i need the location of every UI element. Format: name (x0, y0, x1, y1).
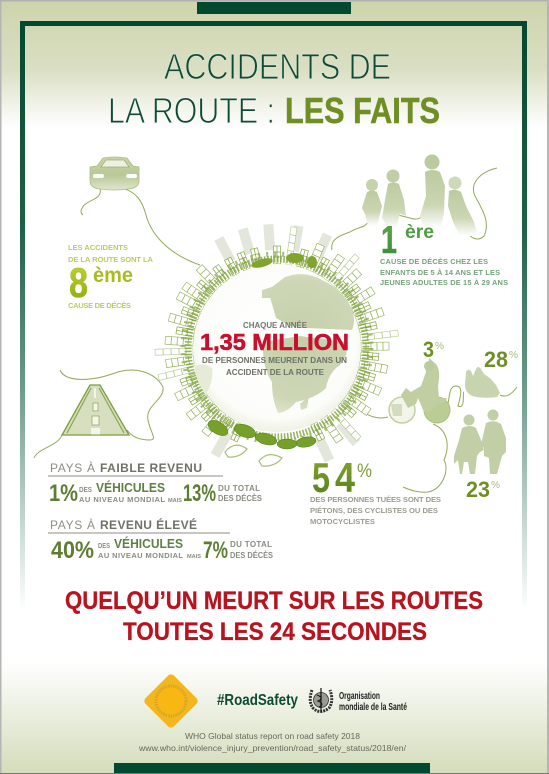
low income countries (48, 460, 263, 507)
faded far buildings (211, 224, 361, 462)
stat: 3 percent: % (435, 341, 444, 352)
trees at the top of the ring (250, 253, 317, 270)
stat: 8th cause: LES ACCIDENTS (68, 243, 128, 252)
stat: 1st cause: 1 (381, 219, 397, 262)
stat: 1st cause: ère (405, 222, 434, 243)
cable: globe to bicycle, motorcycle and pedestrians (360, 386, 517, 492)
stat: 54 percent: PIÉTONS, DES CYCLISTES OU DES (310, 506, 438, 515)
low income countries: DU TOTAL (218, 484, 260, 493)
low income countries: DES DÉCÈS (218, 494, 263, 503)
stat: 3 percent (423, 337, 444, 362)
key message (65, 587, 483, 646)
city buildings ring (155, 227, 398, 443)
stat: 28 percent: 28 (484, 347, 508, 372)
key message: TOUTES LES 24 SECONDES (123, 618, 427, 646)
globe with city ring (155, 224, 398, 466)
high income countries: PAYS À (50, 517, 95, 532)
low income countries: VÉHICULES (96, 480, 165, 495)
stat: 8th cause: ème (93, 264, 133, 287)
source: www.who.int/violence_injury_prevention/road_safety_status/2018/en/ (138, 743, 407, 753)
globe text: 1,35 MILLION (200, 329, 349, 355)
bottom tab (114, 763, 430, 773)
low income countries: DES (79, 485, 92, 494)
family silhouettes (362, 154, 478, 236)
title: LA ROUTE : (108, 90, 275, 131)
high income countries: DES (98, 541, 110, 550)
stat: 54 percent: MOTOCYCLISTES (310, 517, 375, 526)
key message: QUELQU’UN MEURT SUR LES ROUTES (65, 587, 483, 615)
stat: 28 percent: % (509, 350, 518, 361)
road icon (62, 385, 129, 435)
low income countries: 13% (183, 480, 216, 507)
globe disc (193, 264, 361, 432)
cable: car to globe (81, 188, 200, 265)
cable: family to globe (332, 168, 497, 250)
stat: 23 percent: % (491, 480, 500, 491)
low income countries: PAYS À (50, 460, 95, 475)
elderly couple (454, 410, 506, 474)
high income countries: MAIS (187, 554, 201, 560)
stat: 23 percent: 23 (466, 477, 490, 502)
low income countries: 1% (49, 480, 78, 507)
cable: road to globe (34, 370, 163, 458)
top tab (197, 2, 351, 14)
low income countries: MAIS (168, 498, 182, 504)
stat: 54 percent (310, 454, 441, 526)
globe text (200, 320, 349, 377)
WHO name (339, 691, 407, 713)
high income countries: DU TOTAL (230, 540, 272, 549)
high income countries (48, 517, 274, 564)
high income countries: 7% (203, 537, 228, 564)
trees at the bottom of the ring (205, 417, 317, 449)
source: WHO Global status report on road safety 2018 (185, 731, 360, 741)
low income countries: AU NIVEAU MONDIAL (79, 495, 165, 504)
motorcycle (465, 367, 500, 398)
globe text: ACCIDENT DE LA ROUTE (226, 368, 325, 377)
stat: 3 percent: 3 (423, 337, 434, 362)
stat: 54 percent: 4 (335, 454, 356, 501)
hashtag: #RoadSafety (217, 692, 298, 709)
stat: 54 percent: 5 (312, 454, 330, 501)
high income countries: DES DÉCÈS (230, 551, 274, 560)
globe text: CHAQUE ANNÉE (243, 320, 308, 330)
stat: 8th cause (68, 243, 154, 310)
stat: 8th cause: 8 (69, 259, 88, 306)
stat: 1st cause: ENFANTS DE 5 À 14 ANS ET LES (380, 268, 500, 277)
WHO name: mondiale de la Santé (339, 702, 407, 713)
frame (20, 21, 527, 611)
title (108, 46, 440, 131)
high income countries: VÉHICULES (114, 536, 183, 551)
stat: 54 percent: % (357, 461, 372, 482)
car icon (90, 157, 139, 190)
high income countries: AU NIVEAU MONDIAL (98, 551, 183, 560)
continents (194, 274, 354, 413)
stat: 8th cause: CAUSE DE DÉCÈS (68, 301, 131, 310)
globe text: DE PERSONNES MEURENT DANS UN (202, 356, 347, 365)
WHO emblem (310, 688, 332, 712)
title: LES FAITS (285, 90, 440, 131)
source (138, 731, 407, 753)
stat: 54 percent: DES PERSONNES TUÉES SONT DES (310, 495, 441, 504)
WHO name: Organisation (339, 691, 380, 702)
stat: 8th cause: DE LA ROUTE SONT LA (68, 255, 154, 264)
high income countries: REVENU ÉLEVÉ (100, 517, 197, 532)
low income countries: FAIBLE REVENU (100, 461, 202, 475)
road safety sign logo (143, 673, 199, 729)
cyclist (389, 358, 450, 423)
pale trees below the ring (225, 445, 282, 466)
title: ACCIDENTS DE (164, 46, 391, 87)
high income countries: 40% (51, 537, 94, 564)
stat: 1st cause: CAUSE DE DÉCÈS CHEZ LES (380, 257, 488, 266)
stat: 1st cause (380, 219, 508, 287)
stat: 1st cause: JEUNES ADULTES DE 15 À 29 ANS (380, 278, 508, 287)
